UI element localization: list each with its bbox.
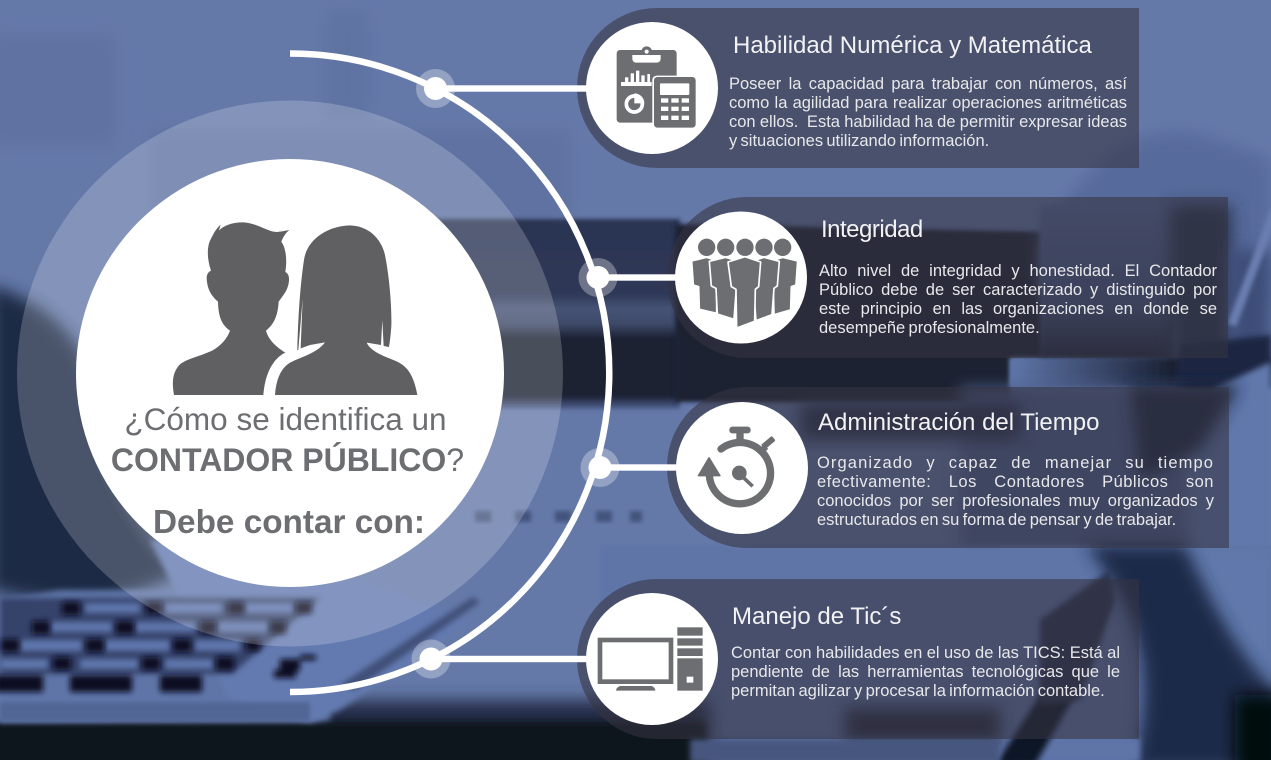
panel: Habilidad Numérica y Matemática — [577, 8, 1139, 168]
panel: Administración del Tiempo — [667, 387, 1229, 548]
description: Organizado y capaz de manejar su tiempo — [817, 454, 1214, 472]
description: conocidos por ser profesionales muy organizados y — [817, 492, 1214, 510]
heading: Manejo de Tic´s — [732, 603, 901, 630]
description: Público debe de ser caracterizado y distinguido por — [819, 280, 1217, 298]
description: Alto nivel de integridad y honestidad. El Contador — [819, 262, 1217, 280]
description: desempeñe profesionalmente. — [819, 318, 1040, 336]
heading: Administración del Tiempo — [818, 409, 1099, 436]
central heading text — [111, 401, 464, 540]
description: y situaciones utilizando información. — [729, 132, 989, 150]
question line one: ¿Cómo se identifica un — [124, 401, 447, 437]
node: Manejo de Tic´s — [412, 640, 588, 678]
description: como la agilidad para realizar operaciones aritméticas — [729, 94, 1127, 112]
heading: Habilidad Numérica y Matemática — [733, 32, 1092, 59]
description — [731, 644, 1120, 700]
subheading: Debe contar con: Debe contar con: — [153, 504, 425, 540]
description — [729, 74, 1127, 150]
icon: group of people — [675, 212, 807, 344]
question line two: CONTADOR PÚBLICO? — [111, 442, 464, 478]
panel: Manejo de Tic´s — [577, 579, 1139, 739]
node: Habilidad Numérica — [416, 69, 587, 108]
description: efectivamente: Los Contadores Públicos son — [817, 472, 1214, 490]
node: Integridad — [578, 258, 677, 297]
description — [819, 262, 1217, 336]
panel: Integridad — [667, 197, 1228, 358]
description: con ellos. Esta habilidad ha de permitir expresar ideas — [729, 112, 1127, 130]
heading: Integridad — [821, 216, 923, 243]
description: estructurados en su forma de pensar y de trabajar. — [817, 510, 1176, 528]
icon: clipboard and calculator — [586, 22, 718, 154]
description: Poseer la capacidad para trabajar con números, así — [729, 74, 1127, 92]
icon: stopwatch with arrow — [676, 402, 808, 534]
description: pendiente de las herramientas tecnológicas que le — [731, 662, 1120, 680]
description: permitan agilizar y procesar la información contable. — [731, 682, 1105, 700]
description: Contar con habilidades en el uso de las TICS: Está al — [731, 644, 1120, 662]
description: este principio en las organizaciones en donde se — [819, 300, 1217, 318]
icon: desktop computer — [586, 593, 718, 725]
node: Administración del Tiempo — [580, 448, 678, 487]
description — [817, 454, 1214, 528]
